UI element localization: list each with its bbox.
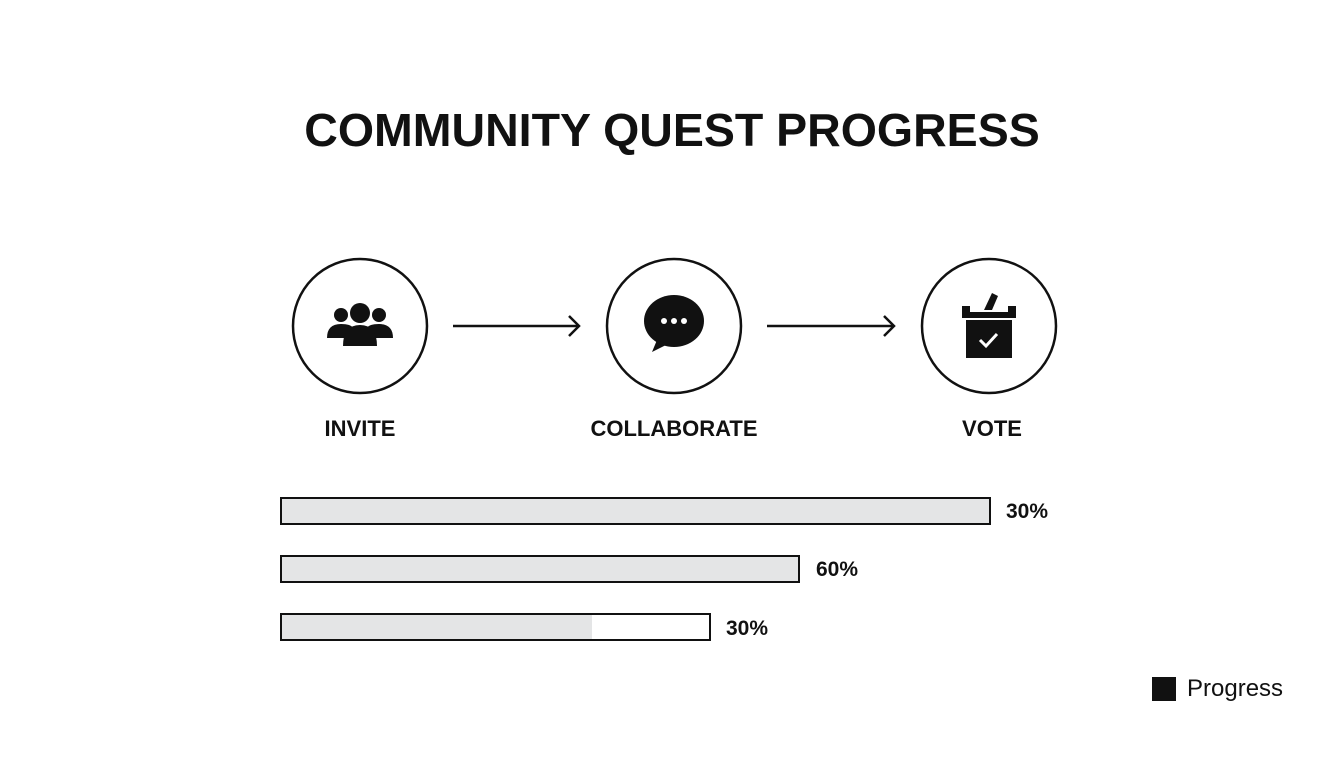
value 3: 30% bbox=[726, 617, 768, 640]
label: collaborate: COLLABORATE bbox=[590, 416, 758, 441]
value 1: 30% bbox=[1006, 500, 1048, 523]
icon: collaborate bbox=[607, 259, 741, 393]
arrow 2 bbox=[767, 316, 894, 336]
title: COMMUNITY QUEST PROGRESS bbox=[304, 104, 1040, 156]
icon: vote bbox=[922, 259, 1056, 393]
bar 1 bbox=[280, 497, 991, 525]
label: invite: INVITE bbox=[325, 416, 395, 441]
label: vote: VOTE bbox=[962, 416, 1022, 441]
value 2: 60% bbox=[816, 558, 858, 581]
legend: Progress bbox=[1187, 675, 1283, 702]
bar 3 bbox=[280, 613, 711, 641]
bar 2 bbox=[280, 555, 800, 583]
process flow bbox=[292, 258, 1058, 394]
arrow 1 bbox=[453, 316, 579, 336]
icon: invite bbox=[293, 259, 427, 393]
